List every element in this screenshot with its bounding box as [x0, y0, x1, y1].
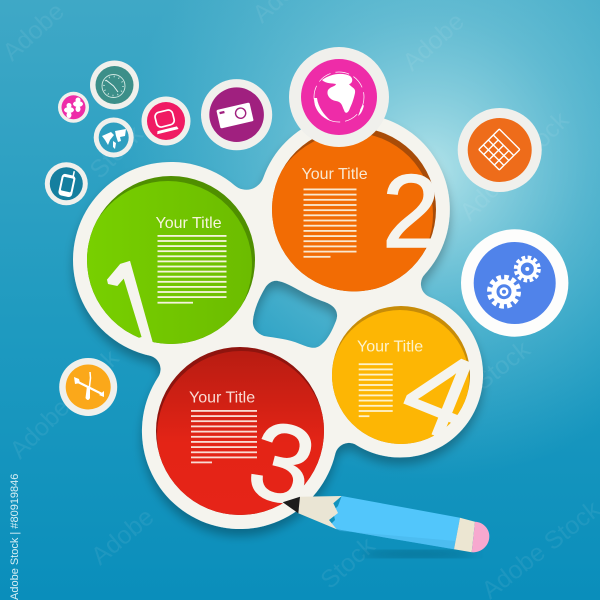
panel 4: yellow — [332, 306, 470, 444]
pencil body — [329, 496, 460, 549]
watermark: Adobe — [397, 7, 470, 76]
number 3: 3 — [238, 397, 327, 531]
number 2: 2 — [382, 154, 440, 270]
text lines 3 — [191, 410, 257, 463]
watermark: Adobe Stock — [251, 307, 364, 434]
title 2: Your Title — [302, 166, 368, 183]
pencil lead — [283, 497, 300, 513]
number 4: 4 — [386, 322, 494, 466]
watermark: Stock — [84, 120, 149, 184]
watermark: Adobe Stock — [4, 344, 125, 464]
text lines 1 — [158, 235, 226, 304]
icon: globe — [289, 47, 389, 147]
panel 2: orange — [269, 128, 440, 296]
watermark: Adobe Stock — [406, 335, 536, 445]
watermark: Adobe Stock — [454, 106, 575, 226]
watermark id: Adobe Stock | #80919846 — [9, 474, 21, 600]
pencil eraser — [472, 522, 489, 552]
watermark: Adobe — [166, 183, 237, 254]
pencil shadow — [360, 550, 476, 558]
text lines 2 — [304, 188, 356, 258]
number 1: 1 — [82, 225, 194, 385]
title 1: Your Title — [156, 215, 222, 232]
icon: laptop — [142, 96, 190, 146]
title 3: Your Title — [189, 390, 255, 406]
ring: white blob frame — [73, 114, 483, 529]
icon: people — [58, 92, 89, 123]
icon: world map — [94, 118, 134, 158]
panel 1: green — [87, 176, 255, 344]
icon: gears — [461, 229, 568, 337]
watermark: Stock — [315, 531, 381, 594]
pencil band — [454, 518, 475, 552]
text lines 4 — [359, 363, 393, 417]
icon: calculator — [458, 108, 542, 192]
watermark: Adobe — [86, 503, 159, 571]
icon: camera — [201, 79, 272, 150]
icon: pencil — [283, 496, 489, 552]
icon: phone — [45, 162, 88, 205]
title 4: Your Title — [357, 338, 423, 356]
panel 3: red — [156, 347, 327, 531]
icon: clock — [90, 60, 139, 110]
icon: tools — [59, 358, 117, 416]
pencil wood — [298, 496, 342, 529]
